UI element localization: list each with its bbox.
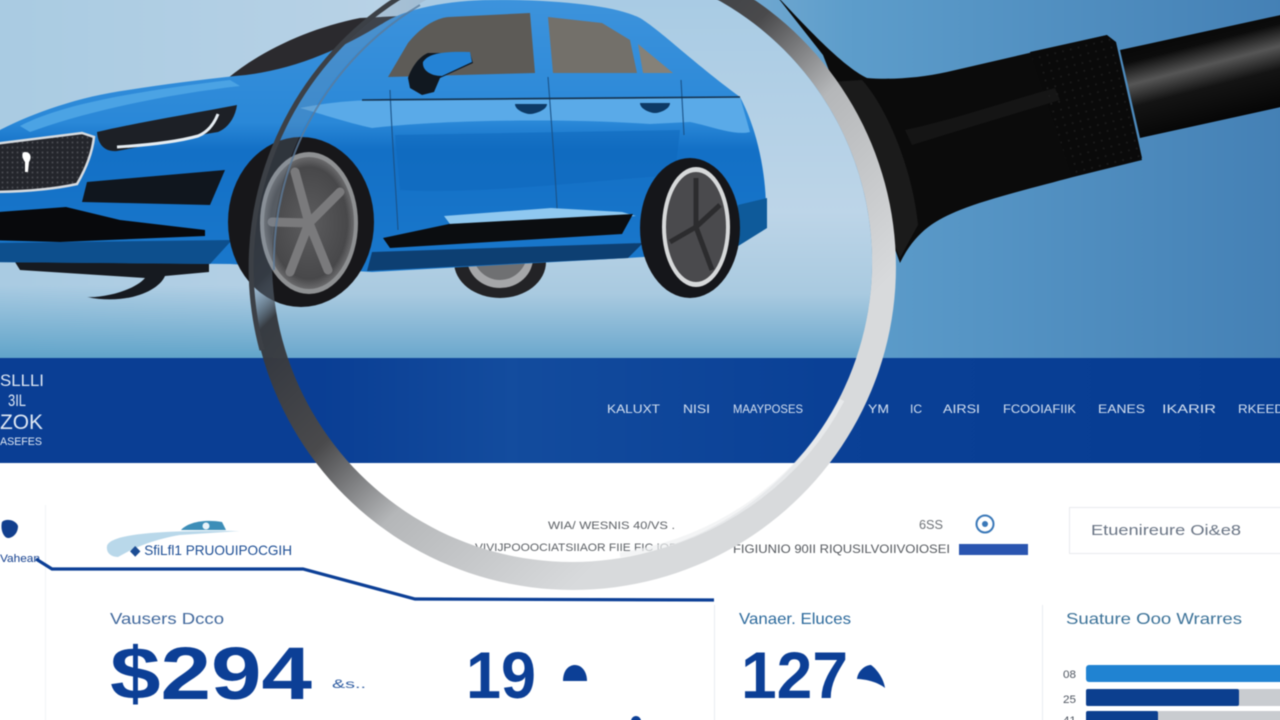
banner navigation: AIRSI: [943, 402, 980, 416]
left brand icon: [1, 520, 18, 538]
rear quarter window: [638, 44, 673, 73]
headlight: [97, 105, 237, 151]
bar chart: [1063, 611, 1280, 720]
black sill: [383, 214, 633, 248]
magnifying glass handle: [775, 0, 1280, 263]
underbody and crescent: [15, 262, 209, 299]
thin grip: [1120, 13, 1280, 138]
lower air intake: [82, 170, 225, 205]
door lines and rail: [362, 77, 740, 230]
bar chart: Suature Ooo Wrarres: [1066, 611, 1242, 628]
bright shoulder band: [300, 97, 750, 133]
door shadow: [395, 130, 680, 191]
flared collar: [775, 0, 1142, 263]
stat: price: $294: [110, 632, 312, 715]
front wheel: [228, 137, 374, 307]
stat: price: Vausers Dcco: [110, 611, 224, 628]
banner logo: SLLLI: [0, 371, 44, 390]
collar cup: [830, 80, 918, 258]
search box: [1070, 508, 1280, 554]
rocker: [367, 243, 643, 271]
small code: 6SS: [919, 517, 943, 532]
left clipped label: Vahean: [0, 553, 40, 565]
banner navigation: IC: [910, 402, 922, 416]
banner navigation: IKARIR: [1162, 402, 1216, 416]
stat: count: 19: [466, 638, 536, 712]
door handles: [515, 103, 670, 114]
blue car: [0, 0, 767, 307]
banner logo: [0, 371, 44, 448]
banner navigation: MAAYPOSES: [733, 402, 803, 416]
stat: price: &s..: [332, 677, 366, 691]
side mirror: [408, 52, 473, 95]
sill highlight: [444, 208, 636, 224]
banner navigation: [607, 402, 1280, 416]
search box: Etuenireure Oi&e8: [1091, 522, 1241, 539]
rear wheel: [640, 158, 740, 298]
knurled grip: [1030, 35, 1142, 177]
trend line: [36, 559, 714, 600]
front window: [388, 13, 535, 77]
lens interior glow: [348, 0, 872, 358]
stat: vehicles: 127: [741, 638, 848, 712]
grille: [0, 133, 94, 192]
far rear roof shadow: [228, 16, 400, 78]
stat: vehicles: Vanaer. Eluces: [739, 611, 851, 628]
banner navigation: RKEED: [1238, 402, 1280, 416]
stat: price: [110, 611, 366, 715]
banner navigation: KALUXT: [607, 402, 661, 416]
middle window: [548, 17, 637, 73]
center caption: [475, 520, 677, 554]
car logo and product title: [107, 521, 292, 558]
dot marker: [631, 716, 641, 720]
banner logo: ZOK: [0, 411, 43, 434]
far wheel: [454, 220, 546, 298]
banner navigation: NISI: [683, 402, 710, 416]
stat: vehicles: [739, 611, 885, 712]
bar chart: 08: [1063, 669, 1076, 681]
navy banner: [0, 358, 1280, 463]
hood highlight: [20, 80, 240, 132]
white dashboard panel: [0, 463, 1280, 720]
lower bumper opening: [0, 207, 205, 242]
car body: [0, 0, 766, 272]
center caption: VIVIJPOOOCIATSIIAOR FIIE FIC IOP: [475, 542, 677, 554]
banner navigation: YM: [868, 402, 889, 416]
right caption: FIGIUNIO 90II RIQUSILVOIIVOIOSEI: [733, 542, 950, 556]
stat: count: [466, 638, 587, 712]
bar chart: 25: [1063, 694, 1076, 706]
banner logo: ASEFES: [0, 436, 42, 448]
small blue button: [959, 544, 1028, 555]
center caption: WIA/ WESNIS 40/VS .: [548, 520, 675, 532]
rear bumper trim: [735, 198, 767, 248]
car logo and product title: ◆ SfiLfl1 PRUOUIPOCGIH: [130, 542, 292, 558]
banner navigation: FCOOIAFIIK: [1003, 402, 1076, 416]
hero background: [0, 0, 1280, 360]
magnifying glass ring: [250, 0, 896, 590]
collar highlight: [905, 88, 1060, 145]
banner logo: 3IL: [8, 391, 26, 410]
banner navigation: EANES: [1098, 402, 1145, 416]
bumper base: [0, 240, 232, 264]
settings icon: [976, 516, 994, 532]
